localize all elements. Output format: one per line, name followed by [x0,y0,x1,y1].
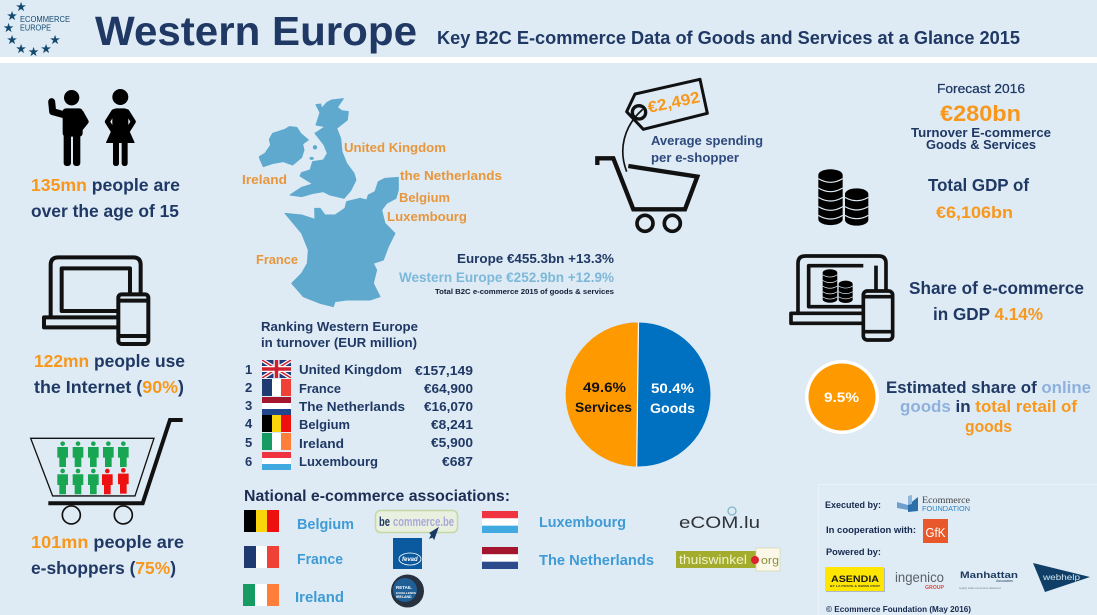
map labels: the Netherlands [400,168,502,183]
map labels: Ireland [242,172,287,187]
country names: Belgium [299,417,350,432]
rank numbers [245,362,253,469]
logo: Ecommerce Europe: ★ [7,10,17,22]
subtitle: Key B2C E-commerce Data of Goods and Services at a Glance 2015 [437,27,1020,48]
country labels: France [297,552,343,568]
text block: market totals [399,251,614,296]
map: Western Europe [242,99,502,307]
ranking flags [262,360,291,470]
turnover values: €64,900 [424,381,473,396]
pie chart: goods vs services [566,322,710,466]
logo: Retail Excellence Ireland: EXCELLENCE [396,591,416,595]
logo: Fevad: fevad [402,557,418,563]
logo: Manhattan Associates: Manhattan [960,570,1018,580]
logo: Ecommerce Europe: ★ [7,34,17,46]
logo: Asendia: BY LA POSTE & SWISS POST [830,584,880,588]
logo: thuiswinkel.org: org [761,555,779,567]
logo: becommerce.be: commerce.be [393,514,454,529]
text: average spending: per e-shopper [651,150,739,165]
heading: ranking [261,320,418,350]
icon: cart with price tag [597,79,707,231]
country labels: Belgium [297,517,354,533]
stat: internet users: 122mn people use [34,351,185,371]
text: average spending [651,133,763,165]
logo: Manhattan Associates: Associates [996,579,1013,583]
icon: man and woman [52,89,134,166]
country names: The Netherlands [299,399,405,414]
forecast 2016: Turnover E-commerce [911,126,1051,140]
powered by: Powered by: [826,547,881,557]
logo: Manhattan Associates: supply chain commerce delivered [959,586,1001,590]
rank numbers: 1 [245,362,252,377]
panel: population [31,89,180,221]
logo: Manhattan Associates [959,570,1018,590]
logo: eCOM.lu [679,507,760,532]
stat: share of e-commerce in GDP: in GDP 4.14% [933,304,1043,324]
in cooperation with [826,519,948,543]
pie chart: goods vs services: Goods [650,400,695,416]
pie chart: goods vs services: 50.4% [651,380,695,396]
icon: laptop and phone [44,257,148,344]
panel: national associations [243,488,780,608]
logo: Ingenico: ingenico [895,569,944,585]
badge: 9.5% [805,360,879,434]
logo: Retail Excellence Ireland [391,574,424,608]
logo: eCOM.lu: eCOM.lu [679,513,760,532]
country labels: The Netherlands [539,553,654,569]
forecast 2016 [911,82,1051,152]
copyright: © Ecommerce Foundation (May 2016) [826,604,971,614]
title: Western Europe [95,8,417,54]
logo: Ecommerce Europe: ★ [16,44,26,56]
forecast 2016: €280bn [940,101,1021,126]
ranking table [245,360,473,470]
stat: total GDP [928,175,1029,222]
stat: share of online goods: goods in total retail of [900,398,1078,416]
logo: Ecommerce Europe: ★ [29,46,39,58]
logo: Asendia [825,567,885,592]
heading: ranking: Ranking Western Europe [261,320,418,334]
pie chart: goods vs services: 49.6% [583,379,627,395]
price label: €2,492 [646,89,702,117]
logo: Fevad [393,538,422,569]
logo: thuiswinkel.org [676,548,780,571]
rank numbers: 5 [245,435,252,450]
stat: e-shoppers: 101mn people are [31,532,184,552]
stat: share of online goods: Estimated share of online [886,379,1091,397]
stat: people over 15: 135mn people are [31,175,180,195]
logo: GfK: GfK [926,526,946,540]
map labels [242,140,502,267]
text block: market totals: Europe €455.3bn +13.3% [457,251,614,266]
flag: Luxembourg [482,511,518,533]
flag: France [244,546,279,568]
turnover values: €157,149 [415,363,473,378]
logo: Ecommerce Foundation: Ecommerce [922,495,970,505]
text block: market totals: Total B2C e-commerce 2015 of goods & services [435,287,614,296]
logo: Ecommerce Europe [4,2,70,58]
panel: credits [818,484,1097,615]
country labels [295,515,654,606]
turnover values: €5,900 [431,435,473,450]
icon: shopping cart with people [31,420,183,524]
stat: total GDP: Total GDP of [928,175,1029,195]
map labels: Luxembourg [387,209,467,224]
logo: Retail Excellence Ireland: RETAIL [396,585,412,590]
logo: Ecommerce Foundation [897,495,970,513]
map labels: Belgium [399,190,450,205]
panel: e-shoppers: e-shoppers (75%) [31,558,176,578]
stat: share of online goods [886,379,1091,436]
panel: e-shoppers [31,420,184,578]
flag: Ireland [243,584,279,606]
turnover values: €8,241 [431,417,473,432]
heading: ranking: in turnover (EUR million) [261,336,417,350]
logo: Ecommerce Europe: EUROPE [20,24,51,32]
flag: Netherlands [482,547,518,569]
turnover values: €687 [442,454,473,469]
executed by [825,495,970,513]
logo: Retail Excellence Ireland: IRELAND [396,595,412,599]
in cooperation with: In cooperation with: [826,525,916,535]
logo: Webhelp: webhelp [1042,572,1080,582]
logo: Ecommerce Europe: ★ [4,22,14,34]
logo: Ecommerce Europe: ★ [50,34,60,46]
logo: Ecommerce Europe: ★ [41,44,51,56]
turnover values: €16,070 [424,399,473,414]
country names [299,362,405,469]
country labels: Ireland [295,590,344,606]
logo: Ecommerce Foundation: FOUNDATION [922,504,970,513]
country names: France [299,381,341,396]
stat: total GDP: €6,106bn [936,203,1013,222]
logo: Ingenico: GROUP [925,585,945,591]
map labels: United Kingdom [344,140,446,155]
stat: share of e-commerce in GDP: Share of e-commerce [909,278,1084,298]
panel: population: over the age of 15 [31,201,179,221]
logo: Webhelp [1033,563,1090,592]
icon: coin stacks [818,169,868,226]
country names: Ireland [299,436,344,451]
rank numbers: 3 [245,398,252,413]
text block: market totals: Western Europe €252.9bn +12.9% [399,270,614,285]
pie chart: goods vs services: Services [575,399,632,415]
stat: share of e-commerce in GDP [909,278,1084,324]
logo: Ecommerce Europe: ★ [16,2,26,14]
logo: Asendia: ASENDIA [831,574,879,585]
country names: Luxembourg [299,454,378,469]
badge: 9.5%: 9.5% [824,389,860,405]
stat: share of online goods: goods [965,418,1012,436]
forecast 2016: Goods & Services [926,138,1036,152]
country names: United Kingdom [299,362,402,377]
country labels: Luxembourg [539,515,626,531]
forecast 2016: Forecast 2016 [937,82,1025,96]
logo: becommerce.be: be [379,514,390,529]
executed by: Executed by: [825,500,881,510]
logo: thuiswinkel.org: thuiswinkel [679,553,747,567]
rank numbers: 2 [245,380,252,395]
logo: becommerce.be [376,510,458,539]
map labels: France [256,252,298,267]
icon: laptop and phone with coins [791,256,893,340]
flag: Belgium [244,510,279,532]
heading: associations: National e-commerce associations: [244,488,510,505]
rank numbers: 4 [245,416,253,431]
text: average spending: Average spending [651,133,763,148]
panel: internet users [34,257,185,397]
turnover values [415,363,473,469]
panel: internet users: the Internet (90%) [34,377,184,397]
rank numbers: 6 [245,454,252,469]
logo: Ecommerce Europe: ECOMMERCE [20,15,70,24]
